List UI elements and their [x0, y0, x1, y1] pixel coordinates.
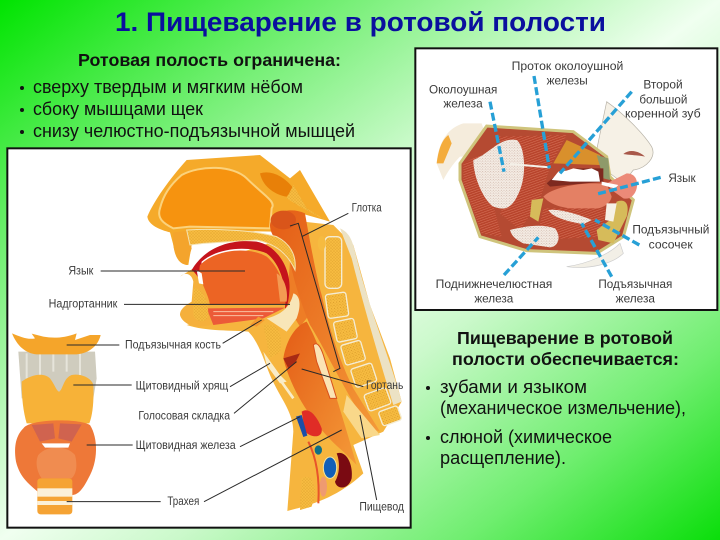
labels: throat anatomy: Голосовая складка: [138, 410, 230, 423]
text block: digestion in oral cavity: Пищеварение в ротовой: [457, 328, 673, 348]
labels: salivary glands: железа: [616, 293, 656, 306]
illustration: head and neck section: [147, 155, 402, 511]
panel: salivary glands: [415, 48, 717, 310]
labels: throat anatomy: Щитовидный хрящ: [136, 379, 229, 392]
labels: salivary glands: железы: [547, 74, 588, 87]
labels: throat anatomy: Щитовидная железа: [136, 439, 236, 452]
labels: salivary glands: большой: [639, 93, 687, 106]
text block: oral cavity boundaries: Ротовая полость ограничена:: [78, 50, 341, 70]
labels: throat anatomy: Подъязычная кость: [125, 338, 221, 351]
text block: oral cavity boundaries: снизу челюстно-подъязычной мышцей: [33, 121, 355, 141]
leader lines: [67, 213, 377, 502]
text block: digestion in oral cavity: (механическое измельчение),: [440, 398, 686, 418]
labels: salivary glands: железа: [443, 98, 483, 111]
labels: throat anatomy: Пищевод: [359, 501, 404, 514]
labels: salivary glands: Подъязычная: [598, 278, 672, 291]
labels: salivary glands: [429, 60, 709, 306]
labels: salivary glands: Околоушная: [429, 83, 497, 96]
text block: oral cavity boundaries: [20, 50, 355, 141]
text block: digestion in oral cavity: слюной (химическое: [440, 427, 612, 447]
labels: salivary glands: Второй: [643, 79, 683, 92]
labels: throat anatomy: Язык: [68, 264, 94, 277]
title: 1. Пищеварение в ротовой полости: [115, 7, 606, 37]
labels: salivary glands: Подъязычный: [632, 224, 709, 237]
labels: throat anatomy: Глотка: [352, 202, 382, 215]
labels: salivary glands: Проток околоушной: [512, 60, 623, 73]
text block: digestion in oral cavity: [426, 328, 686, 468]
illustration: larynx and thyroid front view: [12, 333, 101, 514]
labels: salivary glands: железа: [474, 293, 514, 306]
labels: salivary glands: сосочек: [649, 238, 694, 251]
text block: oral cavity boundaries: сверху твердым и мягким нёбом: [33, 77, 303, 97]
labels: salivary glands: коренной зуб: [625, 108, 701, 121]
labels: throat anatomy: Гортань: [366, 379, 403, 392]
labels: throat anatomy: Трахея: [167, 495, 199, 508]
text block: digestion in oral cavity: полости обеспечивается:: [452, 349, 679, 369]
text block: oral cavity boundaries: сбоку мышцами щек: [33, 99, 203, 119]
labels: throat anatomy: Надгортанник: [49, 298, 118, 311]
leader lines: blue dashes: [490, 76, 661, 277]
labels: salivary glands: Поднижнечелюстная: [436, 278, 552, 291]
illustration: open cheek section: [437, 102, 653, 268]
text block: digestion in oral cavity: зубами и языком: [440, 377, 587, 397]
labels: throat anatomy: [49, 202, 404, 514]
text block: digestion in oral cavity: расщепление).: [440, 448, 566, 468]
labels: salivary glands: Язык: [668, 172, 697, 185]
panel: throat anatomy: [7, 148, 411, 528]
